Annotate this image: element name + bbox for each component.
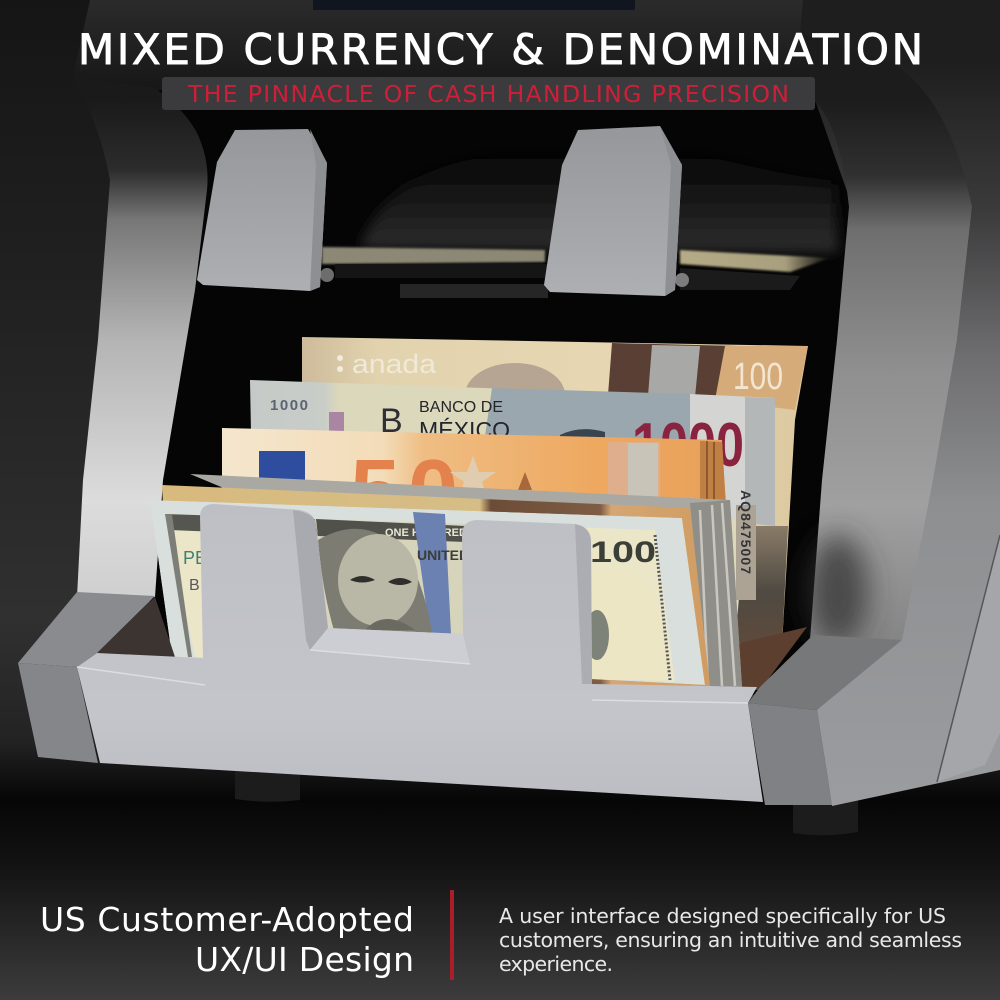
- US 100 note: B: [189, 577, 200, 594]
- feature description: [499, 904, 962, 976]
- serial number: [736, 490, 756, 600]
- feature description: A user interface designed specifically for US: [499, 904, 946, 928]
- Euro 50 notes: 50: [350, 442, 458, 542]
- lower right bumper: [748, 207, 1000, 805]
- dark back of stack: [735, 526, 788, 645]
- banknotes stack: [150, 337, 808, 690]
- US 100 note: UNITED: [417, 547, 469, 563]
- column shadow: [808, 535, 868, 645]
- right denomination: 100: [590, 536, 656, 569]
- Mexican 1000 note: B: [380, 402, 403, 440]
- lettering: anada: [352, 349, 437, 379]
- display at top: [313, 0, 635, 10]
- right body column: [800, 33, 972, 640]
- feature heading: US Customer-Adopted: [40, 900, 414, 939]
- Mexican 1000 note: [250, 380, 775, 645]
- left body column: [73, 77, 208, 597]
- machine interior: [150, 90, 850, 695]
- right hopper guide: [544, 126, 682, 296]
- Canadian 100 note: [302, 337, 808, 645]
- Mexican 1000 note: BANCO DE: [419, 399, 503, 416]
- serial number: AQ8475007: [738, 490, 754, 574]
- machine feet: [235, 770, 858, 835]
- floor behind stack: [735, 627, 807, 690]
- left hopper guide: [197, 129, 327, 291]
- Mexican 1000 note: MÉXICO: [419, 417, 510, 443]
- feature description: experience.: [499, 952, 613, 976]
- Mexican 1000 note: 1000: [632, 411, 744, 480]
- Mexican 1000 note: 1000: [270, 397, 308, 414]
- US 100 note: [150, 500, 705, 685]
- feature heading: [40, 900, 414, 979]
- feature heading: UX/UI Design: [195, 940, 414, 979]
- red divider: [450, 890, 454, 980]
- machine top housing: [73, 0, 815, 102]
- gold edge of stack: [162, 485, 710, 686]
- feature description: customers, ensuring an intuitive and seamless: [499, 928, 962, 952]
- subtitle bar: THE PINNACLE OF CASH HANDLING PRECISION: [187, 80, 789, 108]
- tray front with note guides: [77, 504, 763, 802]
- guide inner side: [293, 510, 328, 650]
- title: MIXED CURRENCY & DENOMINATION: [78, 25, 923, 74]
- notch floor: [310, 628, 470, 664]
- note lettering: PE: [183, 548, 207, 568]
- US 100 note: ONE HUNDRED: [385, 527, 467, 539]
- lower left bumper: [18, 592, 175, 763]
- Canadian 100 note: 100: [733, 356, 783, 398]
- Euro 50 notes: [222, 428, 726, 542]
- silver stack: [190, 474, 742, 687]
- interior dome and feed mechanism: [320, 155, 838, 298]
- centre portrait panel: [316, 519, 470, 640]
- right outer body: [800, 0, 1000, 806]
